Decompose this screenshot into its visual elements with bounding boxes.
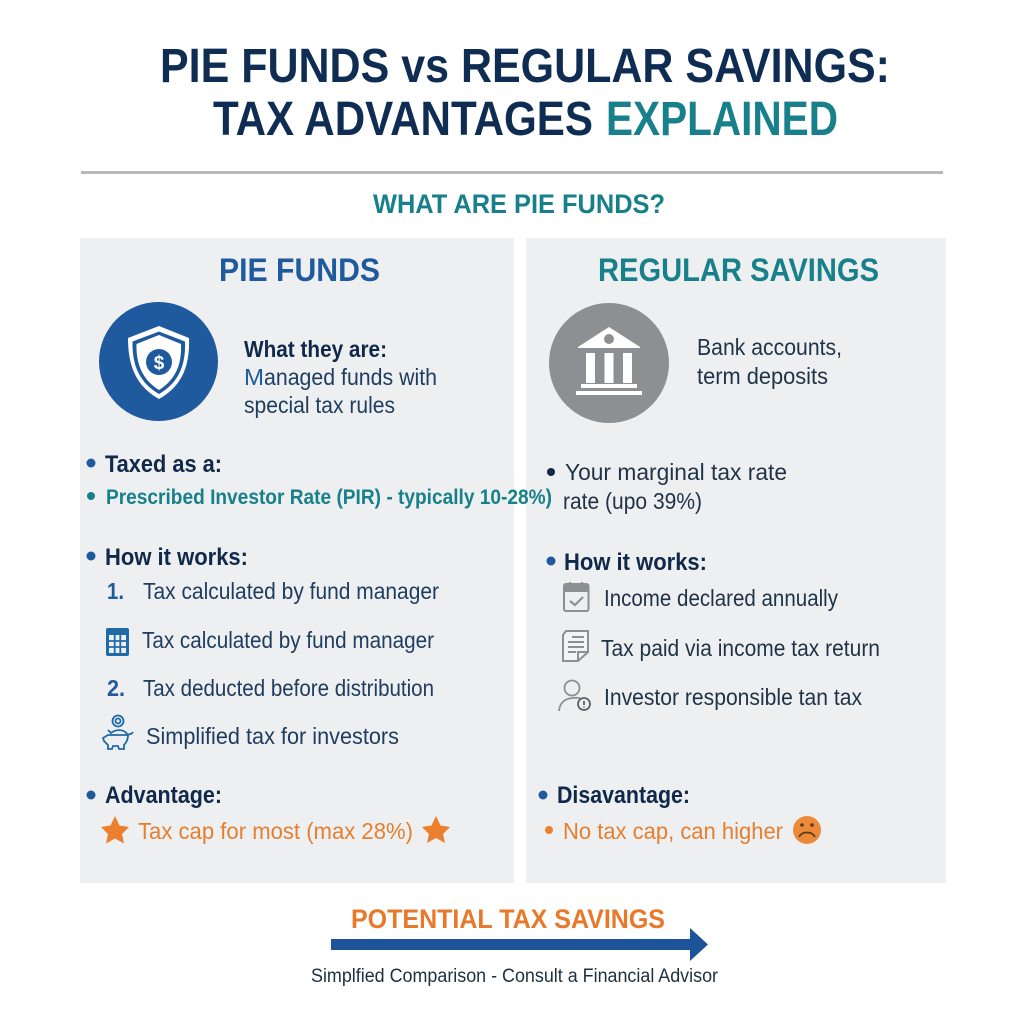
icon: bank	[549, 303, 669, 423]
how it works list: Income declared annually	[604, 585, 838, 611]
panel: PIE funds	[80, 238, 552, 883]
marginal tax rate	[547, 459, 787, 514]
disadvantage: No tax cap, can higher	[563, 818, 783, 844]
marginal tax rate: Your marginal tax rate	[565, 459, 787, 485]
title: PIE FUNDS vs REGULAR SAVINGS:	[160, 40, 890, 93]
footer note: Simplfied Comparison - Consult a Financial Advisor	[311, 966, 719, 987]
disadvantage: Disavantage:	[557, 782, 690, 809]
how it works list: Tax calculated by fund manager	[143, 578, 439, 604]
taxed as: Prescribed Investor Rate (PIR) - typically 10-28%)	[106, 486, 552, 509]
text: bank accounts: term deposits	[697, 363, 828, 389]
section heading: WHAT ARE PIE FUNDS?	[373, 189, 665, 219]
text: bank accounts	[697, 334, 842, 389]
icon: person with question	[559, 680, 590, 711]
disadvantage	[538, 782, 821, 844]
icon: shield with dollar: $	[154, 353, 165, 374]
how it works list	[86, 544, 439, 749]
advantage: Advantage:	[105, 782, 222, 809]
icon: document	[563, 631, 588, 661]
how it works list: Investor responsible tan tax	[604, 684, 862, 710]
icon: star	[101, 816, 129, 844]
text: what they are: special tax rules	[244, 392, 395, 418]
icon: sad face	[793, 816, 821, 844]
how it works list: Simplified tax for investors	[146, 723, 399, 749]
advantage	[86, 782, 450, 844]
text: what they are	[244, 336, 437, 418]
text: what they are: anaged funds with	[264, 364, 437, 390]
icon: calendar	[564, 582, 588, 611]
panel: regular savings	[526, 238, 946, 883]
how it works list: 1.	[107, 578, 124, 604]
advantage: Tax cap for most (max 28%)	[138, 818, 413, 844]
icon: shield with dollar	[99, 302, 218, 421]
tax savings label: POTENTIAL TAX SAVINGS	[351, 904, 665, 934]
taxed as: Taxed as a:	[105, 451, 222, 478]
heading: PIE funds: PIE FUNDS	[219, 252, 380, 288]
title: EXPLAINED	[606, 93, 838, 146]
title	[160, 40, 890, 146]
text: what they are: What they are:	[244, 336, 387, 362]
marginal tax rate: rate (upo 39%)	[563, 488, 702, 514]
taxed as	[86, 451, 552, 509]
icon: piggy bank	[103, 716, 133, 749]
arrow	[331, 928, 708, 961]
how it works list: How it works:	[105, 544, 248, 571]
how it works list: Tax calculated by fund manager	[142, 627, 434, 653]
text: what they are: M	[244, 364, 264, 390]
icon: star	[422, 816, 450, 843]
how it works list: Tax deducted before distribution	[143, 675, 434, 701]
how it works list: 2.	[107, 675, 125, 701]
icon: calculator	[106, 628, 129, 656]
how it works list: How it works:	[564, 549, 707, 576]
title: TAX ADVANTAGES	[213, 93, 593, 146]
how it works list	[546, 549, 880, 711]
text: bank accounts: Bank accounts,	[697, 334, 842, 360]
how it works list: Tax paid via income tax return	[601, 635, 880, 661]
heading: regular savings: REGULAR SAVINGS	[598, 252, 879, 288]
